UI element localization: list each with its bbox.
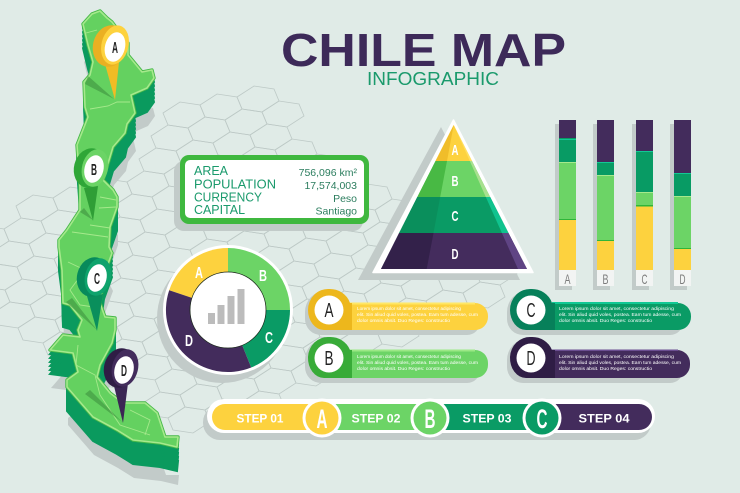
facts values: Santiago — [316, 206, 357, 218]
segment A — [169, 248, 228, 310]
pin C — [73, 254, 115, 331]
pin A — [88, 22, 133, 100]
facts values: 17,574,003 — [304, 180, 357, 192]
donut letters: A — [195, 265, 203, 282]
step circle C: C — [536, 404, 548, 434]
donut letters: C — [265, 330, 273, 347]
step circle B: B — [424, 404, 436, 434]
step 03 segment — [430, 404, 542, 430]
facts labels — [194, 163, 276, 217]
level C — [399, 197, 508, 233]
callout A text: Lorem ipsum dolor sit amet, consectetur adipiscing — [357, 306, 462, 311]
callout C — [507, 289, 691, 335]
callout C text: Lorem ipsum dolor sit amet, consectetur adipiscing — [559, 306, 675, 311]
map side extrusion — [50, 15, 178, 471]
step circle C — [522, 398, 562, 438]
callout B text: elit. Sin aliud quid voles, postea. Eam tum adesse, cum — [357, 360, 478, 365]
pin A letter: A — [112, 40, 118, 57]
callout B — [305, 337, 488, 383]
pin D — [100, 345, 142, 423]
donut letters: B — [259, 268, 267, 285]
level B — [417, 161, 490, 197]
callout B: B — [324, 348, 334, 370]
callout D — [507, 337, 690, 383]
callout D text: elit. Sin aliud quid voles, postea. Eam tum adesse, cum — [559, 360, 681, 365]
step circle A — [302, 398, 342, 438]
hexagon grid background — [0, 86, 517, 433]
callout C text: dolor omnis absit. Duo Reges: constructio — [559, 318, 653, 323]
donut shadow — [157, 253, 287, 383]
step circle A: A — [316, 404, 328, 434]
bar D — [670, 120, 691, 290]
facts values: Peso — [333, 193, 357, 205]
step labels: STEP 03 — [462, 414, 512, 426]
pin shadows on map — [66, 76, 122, 422]
pyramid chart — [358, 120, 533, 280]
callout D text — [559, 354, 681, 371]
level D: D — [452, 246, 459, 263]
title: CHILE MAP — [281, 24, 566, 76]
step labels: STEP 04 — [578, 414, 630, 426]
level B: B — [452, 173, 459, 190]
bar A — [555, 120, 576, 290]
facts labels: CAPITAL — [194, 202, 245, 217]
callout C: C — [526, 300, 536, 322]
callout A text — [357, 306, 478, 323]
level A — [436, 125, 472, 161]
callout C text: elit. Sin aliud quid voles, postea. Eam tum adesse, cum — [559, 312, 681, 317]
pin B — [70, 145, 112, 221]
step labels: STEP 01 — [236, 414, 284, 426]
bar D: D — [680, 271, 686, 287]
stacked bars chart — [555, 120, 691, 290]
map of Chile — [50, 11, 179, 485]
callout B text: Lorem ipsum dolor sit amet, consectetur adipiscing — [357, 354, 462, 359]
map region borders — [68, 30, 150, 435]
segment B — [228, 248, 290, 310]
facts labels: AREA — [194, 163, 228, 178]
map top surface — [50, 11, 178, 447]
callout A — [305, 289, 488, 335]
facts labels: POPULATION — [194, 176, 276, 192]
facts values — [299, 167, 357, 218]
facts labels: CURRENCY — [194, 190, 262, 204]
step 01 segment — [212, 404, 322, 430]
pin C letter: C — [94, 271, 100, 288]
callout D text: dolor omnis absit. Duo Reges: constructio — [559, 366, 653, 371]
bar B: B — [602, 271, 608, 287]
step 02 segment — [322, 404, 430, 430]
level D — [381, 233, 527, 269]
bar B — [593, 120, 614, 290]
steps bar — [203, 398, 655, 440]
donut chart — [157, 245, 293, 383]
callout A text: dolor omnis absit. Duo Reges: constructio — [357, 318, 451, 323]
step circle B — [410, 398, 450, 438]
donut letters — [185, 265, 273, 350]
callout A: A — [324, 300, 334, 322]
callout D: D — [526, 348, 536, 370]
panel: country facts — [174, 155, 369, 231]
bar A: A — [564, 271, 571, 287]
callout C text — [559, 306, 681, 323]
pin B letter: B — [91, 162, 97, 179]
map shadow — [51, 49, 179, 485]
segment C — [228, 310, 290, 368]
bar icon — [208, 289, 244, 324]
step 04 segment — [542, 404, 652, 430]
level C: C — [452, 208, 459, 225]
level A: A — [452, 142, 459, 159]
step labels: STEP 02 — [352, 414, 400, 426]
callout A text: elit. Sin aliud quid voles, postea. Eam tum adesse, cum — [357, 312, 478, 317]
callout D text: Lorem ipsum dolor sit amet, consectetur adipiscing — [559, 354, 675, 359]
pyramid shadow — [358, 127, 520, 280]
subtitle: INFOGRAPHIC — [367, 69, 499, 89]
facts values: 756,096 km² — [299, 167, 357, 179]
pin D letter: D — [121, 363, 127, 380]
bar C — [632, 120, 653, 290]
donut letters: D — [185, 333, 193, 350]
step labels — [236, 414, 630, 426]
callout B text — [357, 354, 478, 371]
callout B text: dolor omnis absit. Duo Reges: constructio — [357, 366, 451, 371]
steps shadow — [203, 405, 651, 440]
segment D — [166, 290, 251, 372]
bar C: C — [642, 271, 648, 287]
